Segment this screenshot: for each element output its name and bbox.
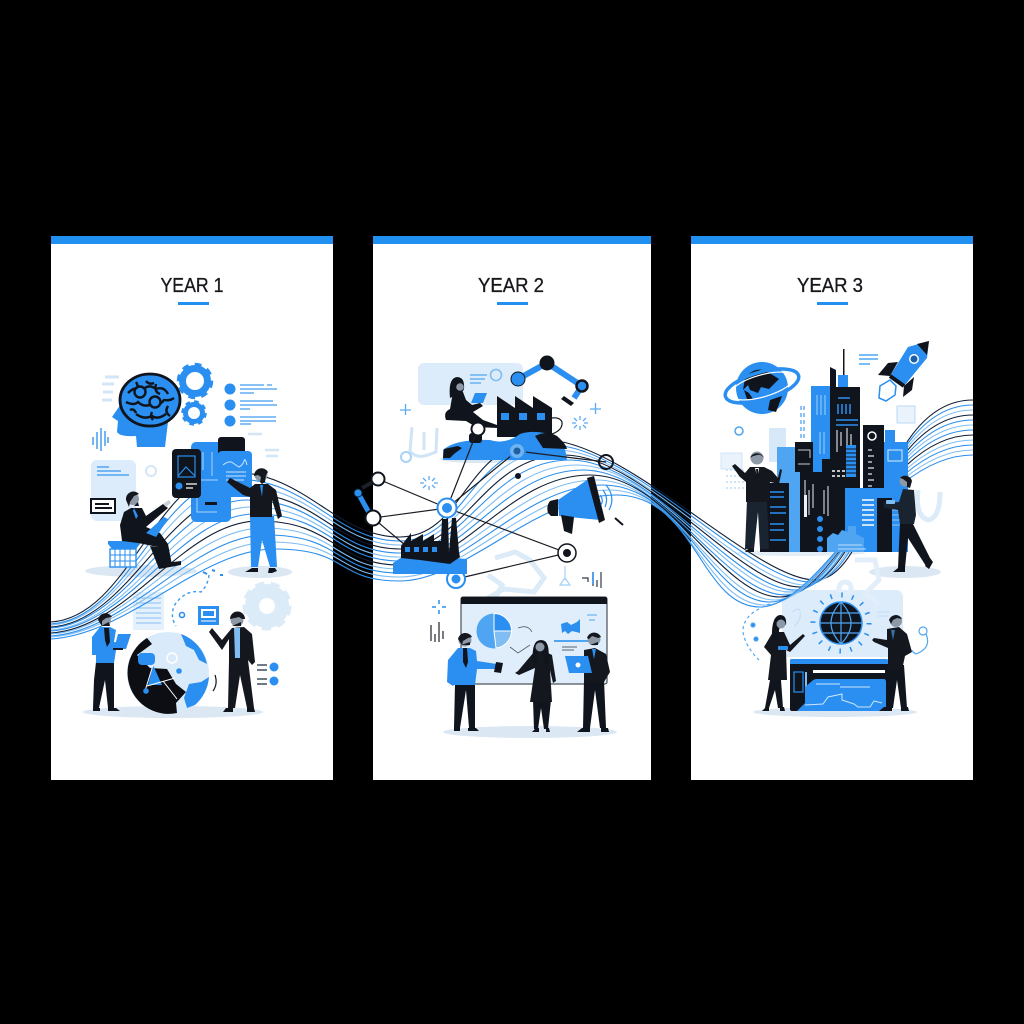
rocket caption lines <box>859 355 878 364</box>
globe on light card <box>792 595 890 651</box>
presentation screen with charts <box>461 597 607 684</box>
dashed side arcs <box>743 604 928 660</box>
person: seated man with laptop <box>108 492 181 569</box>
console with chart <box>790 659 888 711</box>
heading: year 2: YEAR 2 <box>478 275 544 297</box>
network connection lines <box>373 429 606 579</box>
year 1 illustrations <box>91 365 282 714</box>
doc icon and ring <box>735 427 743 435</box>
blue monitor icon <box>180 606 219 625</box>
network nodes <box>366 422 613 588</box>
person: woman in dark suit <box>515 640 556 732</box>
year 3 pale background details <box>721 406 941 717</box>
icon: plus and sparkle marks <box>400 403 601 490</box>
icon: large gear <box>179 365 211 397</box>
person: man with laptop <box>565 632 610 732</box>
skyline buildings <box>765 349 908 552</box>
person: man in blue jacket with tablet <box>92 613 131 711</box>
panel: year 1 card <box>51 236 333 780</box>
small blue scatter marks <box>203 570 223 575</box>
mini robot arm at left edge <box>354 479 378 518</box>
checklist icons and lines <box>224 384 277 426</box>
icon: lower factory with chimneys <box>393 518 467 574</box>
devices stack <box>172 437 252 522</box>
year 2 illustrations <box>354 356 623 732</box>
year 2 pale background details <box>401 363 617 738</box>
person: walking man <box>884 476 933 572</box>
icon: small gear <box>183 402 205 424</box>
globe with network lines <box>127 632 216 714</box>
sparkle and mini bars near screen <box>431 600 446 642</box>
person: woman sitting with laptop <box>445 370 502 428</box>
year 3 illustrations <box>722 341 933 711</box>
person: man pointing at monitor <box>209 612 255 712</box>
icon: megaphone <box>547 476 623 534</box>
icon: factory <box>497 396 562 437</box>
heading: year 3: YEAR 3 <box>797 275 863 297</box>
panel: year 2 card <box>373 236 651 780</box>
light note card text and black message icon <box>91 467 129 513</box>
small bar glyph <box>93 428 108 451</box>
blue hill and machines <box>443 432 567 460</box>
small antenna and bar glyph <box>560 566 601 588</box>
year 1 pale background details <box>83 377 292 718</box>
person: woman presenting <box>762 615 805 711</box>
light card text <box>470 375 487 383</box>
panel: year 3 card <box>691 236 973 780</box>
icon: rocket <box>878 341 929 401</box>
dashed path with circle <box>172 575 209 626</box>
icon: robot arm <box>511 356 588 406</box>
icon: brain head <box>112 374 180 447</box>
person: standing man in blue trousers <box>227 468 282 573</box>
flowing wave lines connecting the years <box>51 400 973 639</box>
heading: year 1: YEAR 1 <box>160 275 224 297</box>
person: man with open arms <box>732 452 782 552</box>
icon: ringed globe <box>722 362 802 414</box>
connector nodes <box>257 662 278 686</box>
person: man presenting <box>872 615 912 711</box>
person: man in blue jacket with phone <box>447 633 503 731</box>
